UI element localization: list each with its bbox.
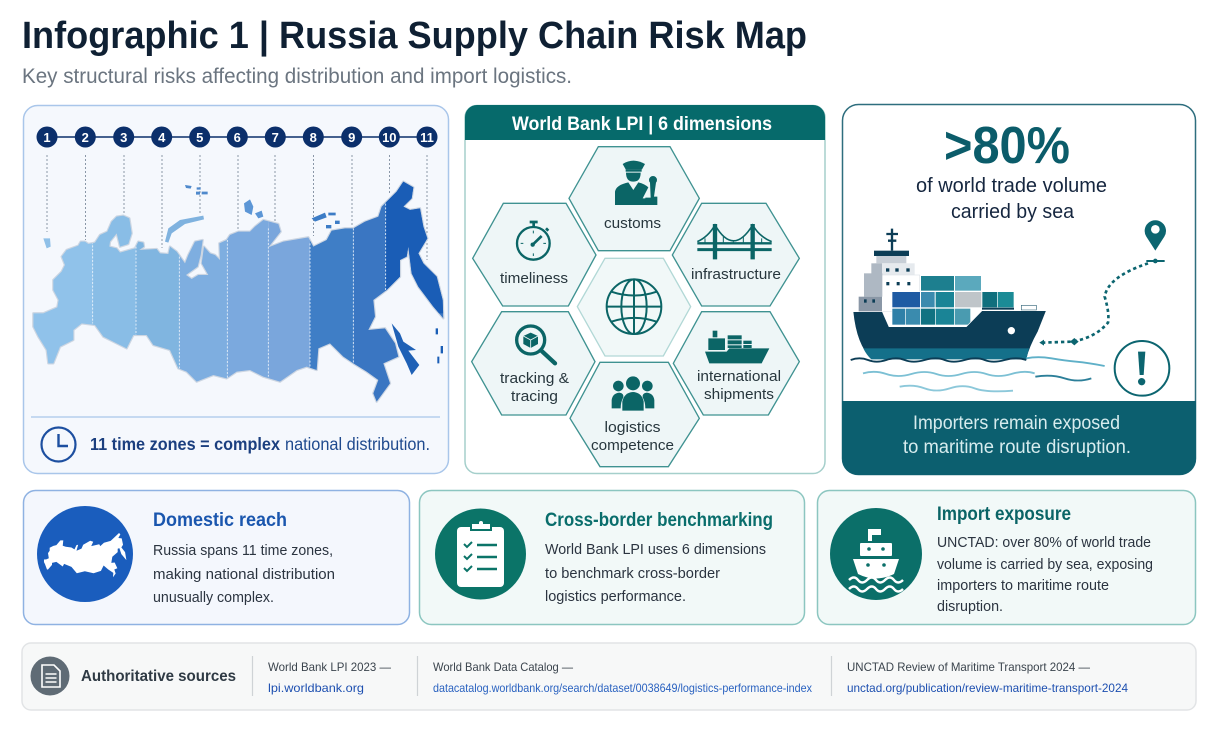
time zone number timeline: 11 [420,130,434,145]
icon: group of people [612,376,654,411]
hexagon: international shipments: shipments [704,386,774,403]
statistic caption: of world trade volume [916,175,1107,197]
panel: authoritative sources [22,643,1196,710]
card: domestic reach [24,490,410,624]
source: UNCTAD: unctad.org/publication/review-maritime-transport-2024 [847,681,1128,695]
card text: Cross-border benchmarking [545,510,773,531]
time zone number timeline [36,126,438,260]
source: World Bank LPI [268,660,391,695]
time zone number timeline: 6 [234,130,241,145]
card text: Import exposure [937,504,1071,525]
waves [851,357,1105,391]
map caption [90,434,430,454]
icon: stopwatch [517,222,550,260]
hexagon: logistics competence [570,362,699,467]
icon: customs officer [615,161,657,205]
hexagon: timeliness [473,203,596,306]
hexagon: infrastructure: infrastructure [691,266,781,283]
time zone number timeline: 4 [158,130,166,145]
source: UNCTAD: UNCTAD Review of Maritime Transport 2024 — [847,660,1090,674]
hexagon: tracking and tracing: tracking & [500,370,569,387]
time zone number timeline: 9 [348,130,355,145]
card text: unusually complex. [153,590,274,606]
big statistic: >80% [944,117,1070,175]
panel header: World Bank LPI | 6 dimensions [512,114,772,135]
card text: Domestic reach [153,510,287,531]
statistic caption: carried by sea [951,201,1075,223]
card text: volume is carried by sea, exposing [937,557,1153,573]
hexagon: tracking and tracing: tracing [511,388,558,405]
hexagon: customs: customs [604,215,661,232]
source: World Bank Data Catalog: datacatalog.worldbank.org/search/dataset/0038649/logistics-performance-index [433,681,812,695]
map of Russia by time zone [32,180,444,403]
card text: Russia spans 11 time zones, [153,543,333,559]
hexagon: international shipments: international [697,368,781,385]
exposure banner: to maritime route disruption. [903,437,1131,458]
icon: suspension bridge [697,224,772,259]
card text [545,510,773,605]
icon: document [30,656,70,696]
card text: logistics performance. [545,589,686,605]
map caption: 11 time zones = complex [90,434,280,454]
hexagon: infrastructure [672,203,799,306]
card text: to benchmark cross-border [545,566,720,582]
card text [937,504,1153,615]
title: Infographic 1 | Russia Supply Chain Risk Map [22,15,807,57]
card: import exposure [818,490,1196,624]
panel: maritime exposure [842,104,1196,475]
icon: globe [607,279,661,334]
card text: World Bank LPI uses 6 dimensions [545,542,766,558]
hexagon: tracking and tracing [472,312,595,415]
exposure banner [842,401,1196,475]
panel: World Bank LPI [465,105,825,474]
panel header [465,105,825,140]
hexagon: customs [569,147,699,251]
hexagon: international shipments [673,312,799,415]
icon: cargo ship [705,331,769,363]
source: UNCTAD [847,660,1128,695]
time zone number timeline: 7 [272,130,279,145]
time zone number timeline: 1 [43,130,51,145]
panel: time zone map [20,106,453,474]
icon: clock [42,428,76,462]
icon: Russia silhouette [37,506,133,602]
hexagon: timeliness: timeliness [500,270,568,287]
time zone number timeline: 8 [310,130,317,145]
card text: UNCTAD: over 80% of world trade [937,535,1151,551]
icon: magnifier with parcel [517,326,555,363]
icon: warning [1115,341,1169,396]
source: World Bank Data Catalog [433,660,812,695]
sources heading: Authoritative sources [81,668,236,685]
subtitle: Key structural risks affecting distribution and import logistics. [22,65,572,88]
hexagon: logistics competence: logistics [604,419,660,436]
source: World Bank LPI: World Bank LPI 2023 — [268,660,391,674]
card text: importers to maritime route [937,578,1109,594]
card text [153,510,335,606]
time zone number timeline: 5 [196,130,203,145]
icon: ship on waves [830,508,922,600]
route line with pin [1039,220,1166,346]
source: World Bank Data Catalog: World Bank Data Catalog — [433,660,573,674]
time zone number timeline: 3 [120,130,127,145]
map caption: national distribution. [285,434,430,454]
illustration: container ship [851,229,1105,391]
time zone number timeline: 10 [382,130,397,145]
statistic caption [916,175,1107,223]
card text: disruption. [937,599,1003,615]
source: World Bank LPI: lpi.worldbank.org [268,681,364,695]
card: cross-border benchmarking [420,490,804,624]
islands [43,185,443,375]
hexagon: logistics competence: competence [591,437,674,454]
time zone number timeline: 2 [82,130,89,145]
exposure banner: Importers remain exposed [913,413,1120,434]
hexagon: centre globe [577,258,691,356]
icon: clipboard checklist [435,508,526,600]
card text: making national distribution [153,567,335,583]
